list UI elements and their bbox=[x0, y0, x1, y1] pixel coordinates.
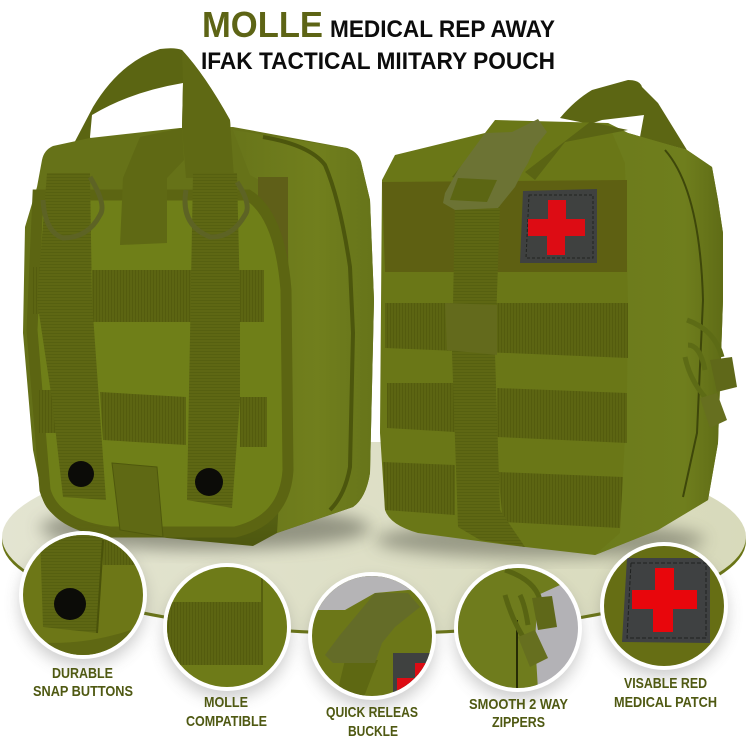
left pouch: back view bbox=[23, 48, 374, 546]
title bbox=[201, 4, 555, 75]
snap buttons bbox=[68, 461, 223, 496]
title: IFAK TACTICAL MIITARY POUCH bbox=[201, 48, 555, 75]
feature labels: SNAP BUTTONS bbox=[33, 683, 133, 700]
centre tab bbox=[120, 128, 184, 245]
d rings bbox=[43, 177, 247, 238]
detail: medical patch bbox=[600, 542, 730, 672]
detail: snap buttons bbox=[19, 530, 150, 660]
strap keeper bbox=[445, 303, 497, 355]
feature labels: VISABLE RED bbox=[624, 675, 707, 692]
velcro area bbox=[258, 177, 288, 282]
handle bbox=[560, 80, 687, 150]
molle row two bbox=[37, 390, 267, 447]
side panel bbox=[595, 123, 723, 555]
flap with tape border bbox=[32, 195, 288, 532]
feature labels: BUCKLE bbox=[348, 723, 398, 740]
feature labels: MEDICAL PATCH bbox=[614, 694, 717, 711]
feature labels: SMOOTH 2 WAY bbox=[469, 696, 568, 713]
red cross patch bbox=[520, 189, 597, 263]
handle bbox=[60, 48, 233, 173]
right pouch: front view bbox=[380, 80, 737, 555]
feature labels: DURABLE bbox=[52, 665, 113, 682]
buckle window bbox=[450, 178, 497, 202]
right vertical strap bbox=[187, 173, 240, 508]
molle rows bbox=[383, 303, 628, 528]
vertical strap bbox=[452, 205, 525, 547]
bottom tab bbox=[112, 463, 163, 537]
zipper pulls bbox=[685, 320, 737, 428]
left vertical strap bbox=[37, 173, 106, 500]
buckle bbox=[443, 119, 547, 210]
feature labels: MOLLE bbox=[204, 694, 248, 711]
background disc bbox=[2, 442, 746, 635]
zipper line bbox=[665, 150, 703, 497]
detail: buckle bbox=[308, 572, 438, 703]
feature labels bbox=[33, 665, 717, 740]
zipper line bbox=[263, 137, 353, 510]
feature labels: ZIPPERS bbox=[492, 714, 545, 731]
top velcro panel bbox=[382, 180, 627, 272]
body bbox=[380, 120, 723, 555]
detail: molle bbox=[163, 563, 291, 691]
side panel bbox=[233, 130, 374, 533]
title: MOLLE bbox=[202, 4, 323, 45]
diagonal webbing bbox=[525, 122, 628, 180]
handle front band bbox=[182, 50, 234, 178]
detail: zippers bbox=[454, 564, 582, 695]
title: MEDICAL REP AWAY bbox=[330, 16, 555, 43]
feature labels: COMPATIBLE bbox=[186, 713, 267, 730]
molle row one bbox=[33, 267, 264, 322]
circle shadows bbox=[20, 540, 727, 707]
pouch body bbox=[23, 127, 374, 546]
feature labels: QUICK RELEAS bbox=[326, 704, 418, 721]
